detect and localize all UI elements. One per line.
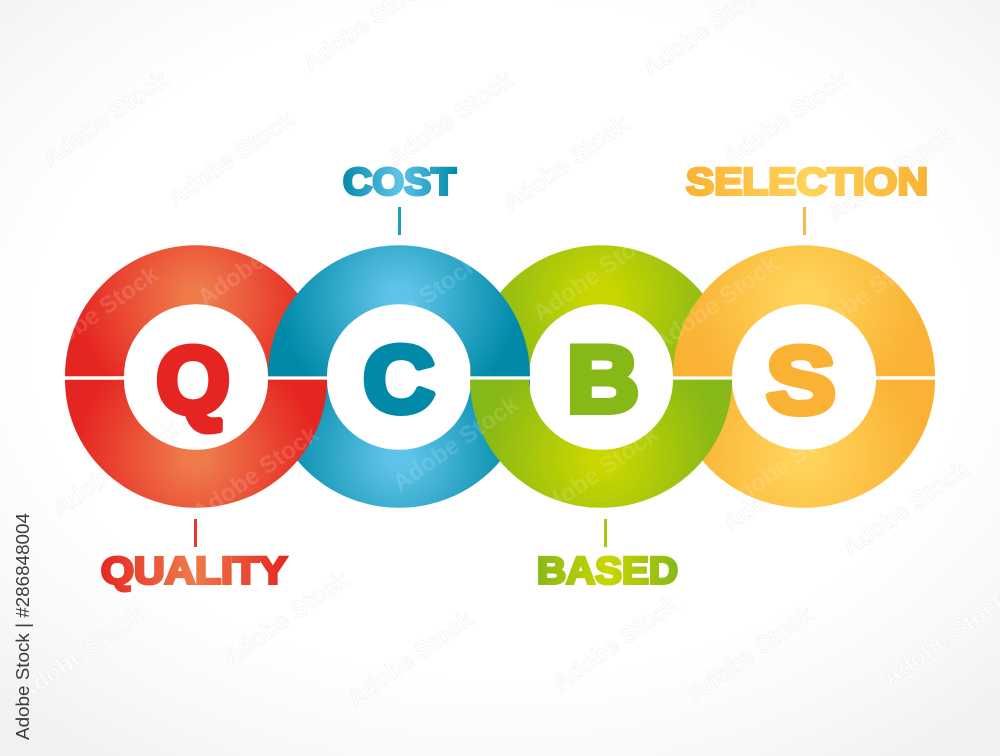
circle rings: upper halves bbox=[65, 245, 935, 376]
letter Q: Q bbox=[156, 328, 230, 432]
connector: BASED bbox=[604, 519, 607, 547]
letter B: B bbox=[567, 326, 639, 432]
watermark over rings: Adobe Stock bbox=[528, 420, 664, 527]
watermark pattern: Adobe Stock bbox=[683, 600, 819, 707]
ring: C upper half bbox=[268, 245, 530, 376]
ring: B lower half bbox=[470, 380, 732, 508]
watermark pattern: Adobe Stock bbox=[343, 605, 479, 712]
ring: Q lower half bbox=[65, 380, 327, 508]
connector: COST bbox=[398, 207, 401, 235]
connector: QUALITY bbox=[194, 519, 197, 547]
label: QUALITY: QUALITY bbox=[101, 550, 287, 592]
ring: C lower half bbox=[268, 380, 530, 508]
letter S: S bbox=[767, 328, 835, 432]
watermark pattern: Adobe Stock bbox=[383, 65, 519, 172]
label: SELECTION: SELECTION bbox=[686, 162, 928, 204]
watermark over rings: Adobe Stock bbox=[798, 240, 934, 347]
watermark over rings: Adobe Stock bbox=[188, 420, 324, 527]
watermark pattern: Adobe Stock bbox=[718, 430, 854, 537]
watermark pattern: Adobe Stock bbox=[48, 415, 184, 522]
label: BASED: BASED bbox=[537, 550, 678, 592]
watermark pattern: Adobe Stock bbox=[38, 65, 174, 172]
label: COST: COST bbox=[343, 162, 456, 204]
ring: Q upper half bbox=[65, 245, 327, 376]
watermark pattern: Adobe Stock bbox=[823, 120, 959, 227]
watermark pattern: Adobe Stock bbox=[548, 590, 684, 697]
watermark over rings: Adobe Stock bbox=[718, 410, 854, 517]
watermark over rings: Adobe Stock bbox=[28, 260, 164, 367]
watermark pattern: Adobe Stock bbox=[13, 600, 149, 707]
circle rings: lower halves bbox=[65, 380, 935, 508]
watermark pattern: Adobe Stock bbox=[218, 565, 354, 672]
watermark over rings: Adobe Stock bbox=[528, 220, 664, 327]
watermark over rings: Adobe Stock bbox=[388, 390, 524, 497]
stock id text: Adobe Stock | #286848004 bbox=[12, 513, 33, 740]
watermark over rings bbox=[28, 205, 934, 527]
ring: B upper half bbox=[470, 245, 732, 376]
watermark over rings: Adobe Stock bbox=[193, 205, 329, 312]
connector: SELECTION bbox=[803, 207, 806, 235]
ring: S upper half bbox=[673, 245, 935, 376]
ring: S lower half bbox=[673, 380, 935, 508]
watermark pattern: Adobe Stock bbox=[718, 65, 854, 172]
watermark over rings: Adobe Stock bbox=[348, 250, 484, 357]
watermark over rings: Adobe Stock bbox=[648, 250, 784, 357]
letter C: C bbox=[363, 328, 435, 432]
watermark pattern: Adobe Stock bbox=[498, 110, 634, 217]
watermark pattern: Adobe Stock bbox=[838, 455, 974, 562]
watermark pattern: Adobe Stock bbox=[163, 105, 299, 212]
